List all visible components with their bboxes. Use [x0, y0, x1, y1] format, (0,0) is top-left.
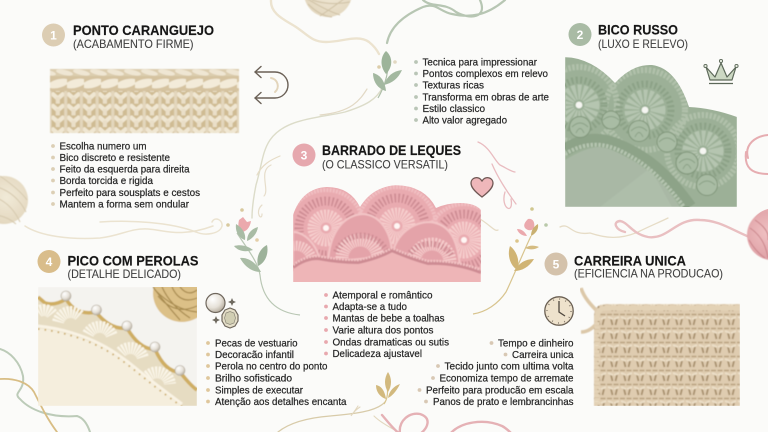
number badge 4 [38, 250, 60, 273]
panel: carreira unica [418, 252, 740, 408]
bullet list 1: Mantem a forma sem ondular [60, 200, 190, 210]
heading 5: CARREIRA UNICA [574, 254, 686, 268]
icon: heart [471, 178, 493, 197]
number badge 5: 5 [553, 258, 560, 272]
bullet list 3: Adapta-se a tudo [332, 302, 407, 313]
heading 5 [574, 254, 723, 280]
bullet list 5: Economiza tempo de arremate [440, 374, 574, 384]
sprig: pink flower and gold leaves right [473, 207, 548, 314]
heading 3: (O CLASSICO VERSATIL) [322, 158, 448, 172]
icon: return arrow [255, 66, 288, 104]
number badge 1: 1 [50, 28, 57, 42]
bullet list 5: Tempo e dinheiro [498, 338, 574, 350]
panel: barrado de leques [288, 143, 500, 360]
bullet list 4: Brilho sofisticado [215, 374, 292, 384]
heading 4: PICO COM PEROLAS [68, 254, 198, 268]
heading 2 [598, 22, 688, 51]
icon: pearls [206, 294, 238, 328]
crochet photo 3 [293, 185, 481, 282]
icon: crown [704, 59, 738, 84]
number badge 4: 4 [46, 255, 53, 269]
bullet list 1: Escolha numero um [60, 142, 146, 152]
bullet list 4: Atenção aos detalhes encanta [215, 397, 347, 408]
sprig: pink flower left [226, 208, 300, 315]
bullet list 5 [418, 338, 574, 408]
heading 2: BICO RUSSO [598, 22, 678, 38]
bullet list 4: Simples de executar [215, 386, 304, 396]
bullet list 5: Carreira unica [512, 350, 574, 361]
panel: list top centre: Alto valor agregado [422, 116, 507, 126]
panel: ponto caranguejo [42, 23, 239, 210]
panel: list top centre: Texturas ricas [422, 80, 484, 92]
heading 5: (EFICIENCIA NA PRODUCAO) [574, 266, 723, 280]
bullet list 1: Feito da esquerda para direita [60, 164, 190, 176]
crochet photo 1 [50, 69, 239, 133]
bullet list 3: Varie altura dos pontos [332, 326, 434, 336]
panel: list top centre: Tecnica para impressionar [422, 58, 538, 68]
number badge 2 [568, 23, 592, 46]
bullet list 3 [324, 290, 449, 360]
bullet list 4: Decoracão infantil [215, 350, 294, 361]
heading 3 [322, 143, 461, 172]
bullet list 1 [51, 142, 200, 210]
heading 1: (ACABAMENTO FIRME) [73, 37, 194, 51]
yarn ball: top cream [304, 0, 352, 17]
bullet list 4 [206, 338, 347, 408]
heading 1 [73, 23, 214, 51]
heading 2: (LUXO E RELEVO) [598, 37, 688, 51]
sprig: gold bottom [376, 372, 400, 404]
icon: clock [545, 297, 573, 325]
bullet list 5: Panos de prato e lembrancinhas [433, 397, 574, 408]
bullet list 5: Tecido junto com ultima volta [444, 362, 574, 372]
bullet list 3: Mantas de bebe a toalhas [332, 314, 444, 324]
panel: list top centre: Estilo classico [422, 104, 485, 115]
panel: list top centre: Pontos complexos em relevo [422, 69, 548, 80]
number badge 1 [42, 24, 65, 46]
bullet list 3: Atemporal e romântico [332, 290, 433, 302]
bullet list 1: Borda torcida e rigida [60, 176, 153, 187]
sprig: green top [373, 51, 402, 98]
crochet photo 5 [581, 288, 740, 406]
panel: bico russo [565, 23, 738, 207]
crochet photo 4 [38, 287, 197, 406]
panel: list top centre [414, 58, 549, 126]
heading 1: PONTO CARANGUEJO [73, 23, 214, 38]
heading 3: BARRADO DE LEQUES [322, 143, 461, 158]
number badge 3 [292, 144, 316, 166]
bullet list 5: Perfeito para producão em escala [426, 386, 574, 396]
bullet list 4: Perola no centro do ponto [215, 362, 328, 372]
number badge 3: 3 [301, 148, 308, 162]
heading 4: (DETALHE DELICADO) [68, 267, 181, 281]
bullet list 1: Perfeito para sousplats e cestos [60, 188, 200, 199]
number badge 5 [544, 252, 568, 276]
number badge 2: 2 [577, 28, 584, 42]
heading 4 [68, 254, 198, 281]
yarn ball: right pink [747, 210, 768, 260]
bullet list 4: Pecas de vestuario [215, 338, 298, 350]
panel: pico com perolas [38, 250, 347, 408]
crochet photo 2 [565, 57, 737, 207]
panel: list top centre: Transforma em obras de arte [422, 92, 549, 104]
yarn ball: left cream [0, 176, 28, 224]
bullet list 3: Ondas dramaticas ou sutis [332, 338, 449, 348]
bullet list 3: Delicadeza ajustavel [332, 349, 422, 360]
bullet list 1: Bico discreto e resistente [60, 153, 170, 164]
